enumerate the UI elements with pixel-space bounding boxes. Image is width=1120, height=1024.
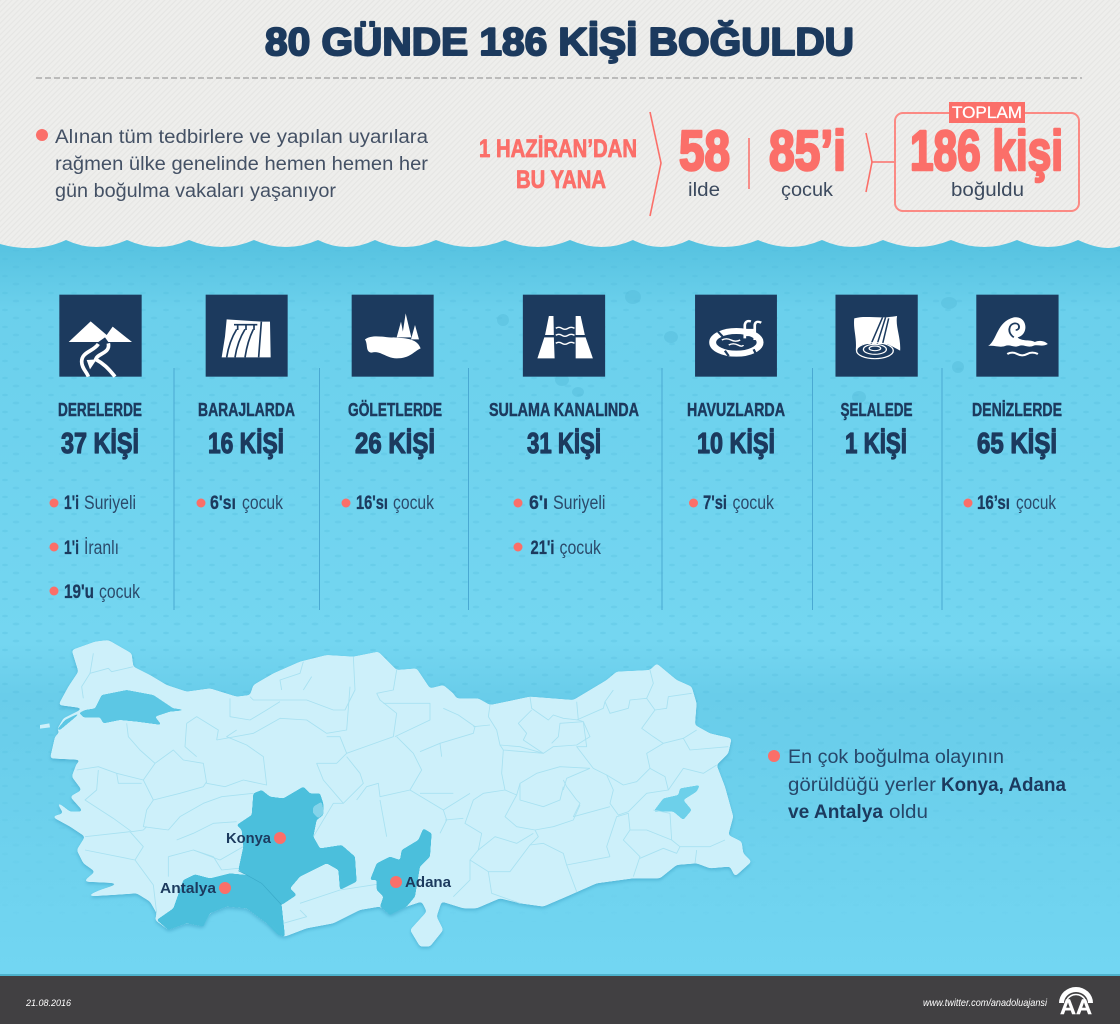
canal details: 6'ı: [529, 493, 548, 514]
map: land outline: [50, 640, 752, 947]
total callout box: 186 kişi: [910, 119, 1063, 183]
map callout text: [768, 747, 1066, 823]
column: ponds: [342, 295, 442, 514]
map: Konya province: [237, 787, 357, 905]
icon: sea wave: [976, 295, 1059, 377]
icon: AA logo: [1059, 987, 1093, 1019]
paper header with wavy bottom edge: [0, 0, 1120, 248]
map: Adana province: [370, 828, 432, 915]
date range heading: BU YANA: [516, 166, 606, 194]
map callout text: Konya, Adana: [941, 775, 1066, 796]
map callout text: ve Antalya: [788, 802, 883, 823]
map: Antalya province: [157, 873, 285, 937]
stat: 85 children: [769, 119, 846, 201]
icon: pond: [352, 295, 434, 377]
canal details: 21'i: [530, 538, 554, 559]
canal details: [514, 493, 606, 559]
icon: pool: [695, 295, 777, 377]
water droplet texture: [2, 360, 1120, 668]
column: waterfalls: ŞELALEDE: [840, 400, 912, 420]
stat: 85 children: çocuk: [781, 180, 834, 201]
column: dams: BARAJLARDA: [198, 400, 295, 420]
arrow: chevron to stats: [650, 112, 661, 216]
intro text block: gün boğulma vakaları yaşanıyor: [55, 181, 337, 202]
column separators: [174, 368, 942, 610]
dam details: 6'sı: [210, 493, 236, 514]
map callout text: En çok boğulma olayının: [788, 747, 1004, 768]
column: streams: [50, 295, 142, 603]
stat: 85 children: 85’i: [769, 119, 846, 183]
title: 80 GÜNDE 186 KİŞİ BOĞULDU: [265, 20, 854, 64]
map: province borders: [77, 653, 728, 923]
sea details: 16’sı: [977, 493, 1010, 514]
column: seas: DENİZLERDE: [972, 400, 1062, 420]
stat: 58 provinces: 58: [679, 119, 730, 183]
map of Turkey: [40, 640, 752, 947]
column: waterfalls: [835, 295, 918, 460]
pond details: 16'sı: [356, 493, 388, 514]
blue water background: [0, 235, 1120, 977]
callout bullet: [768, 750, 780, 762]
column: irrigation canals: 31 KİŞİ: [527, 428, 601, 460]
sea details: çocuk: [1016, 493, 1056, 514]
column: pools: 10 KİŞİ: [697, 428, 775, 460]
stream details: [50, 493, 140, 603]
pool details: [689, 493, 774, 514]
stream details: 19'u: [64, 582, 94, 603]
icon: waterfall: [835, 295, 918, 377]
total callout box: TOPLAM: [952, 103, 1022, 122]
footer date: 21.08.2016: [25, 998, 72, 1009]
pool details: çocuk: [732, 493, 774, 514]
dam details: [196, 493, 283, 514]
map: Tuz lake: [313, 802, 324, 818]
intro text block: Alınan tüm tedbirlere ve yapılan uyarılara: [55, 127, 428, 148]
intro text block: rağmen ülke genelinde hemen hemen her: [55, 154, 429, 175]
canal details: çocuk: [560, 538, 601, 559]
footer bar: [0, 974, 1120, 1024]
canal details: Suriyeli: [553, 493, 606, 514]
map: Konya Antalya border: [238, 871, 282, 905]
pond details: [342, 493, 434, 514]
column: dams: [196, 295, 295, 514]
total callout box: [895, 102, 1079, 211]
map callout text: oldu: [889, 802, 928, 823]
stream details: İranlı: [84, 538, 119, 559]
icon: AA logo: AA: [1060, 996, 1092, 1019]
column: ponds: 26 KİŞİ: [355, 428, 435, 460]
column: streams: DERELERDE: [58, 400, 142, 420]
column: irrigation canals: [489, 295, 639, 559]
total badge: [949, 102, 1025, 123]
map: island: [40, 723, 50, 729]
column: dams: 16 KİŞİ: [208, 428, 284, 460]
stream details: 1'i: [64, 493, 79, 514]
map: Lake Van: [653, 785, 700, 820]
intro text block: [36, 127, 429, 202]
stream details: çocuk: [99, 582, 140, 603]
map label: Konya: Konya: [226, 830, 272, 847]
column: waterfalls: 1 KİŞİ: [845, 428, 907, 460]
icon: mountain stream: [59, 295, 142, 377]
map callout text: görüldüğü yerler: [788, 775, 937, 796]
column: seas: [964, 295, 1062, 514]
sea details: [964, 493, 1056, 514]
map label: Antalya: Antalya: [160, 880, 217, 897]
stream details: Suriyeli: [84, 493, 136, 514]
column: streams: 37 KİŞİ: [61, 428, 139, 460]
column: ponds: GÖLETLERDE: [348, 400, 442, 420]
column: irrigation canals: SULAMA KANALINDA: [489, 400, 639, 420]
icon: canal: [523, 295, 605, 377]
pond details: çocuk: [393, 493, 434, 514]
date range heading: 1 HAZİRAN’DAN: [479, 135, 637, 163]
column: seas: 65 KİŞİ: [977, 428, 1057, 460]
map: Sea of Marmara: [57, 690, 190, 730]
stream details: 1'i: [64, 538, 79, 559]
stat: 58 provinces: [679, 119, 730, 201]
water droplets: [497, 290, 964, 403]
intro bullet: [36, 129, 48, 141]
pool details: 7'si: [703, 493, 727, 514]
stat: 58 provinces: ilde: [688, 180, 720, 201]
footer twitter link: www.twitter.com/anadoluajansi: [923, 997, 1048, 1009]
column: pools: HAVUZLARDA: [687, 400, 785, 420]
column: pools: [687, 295, 785, 514]
dam details: çocuk: [242, 493, 283, 514]
arrow: connector to total: [866, 133, 895, 192]
date range heading: [479, 135, 637, 194]
icon: dam: [206, 295, 288, 377]
map label: Adana: Adana: [405, 874, 452, 891]
total callout box: boğuldu: [951, 180, 1024, 201]
